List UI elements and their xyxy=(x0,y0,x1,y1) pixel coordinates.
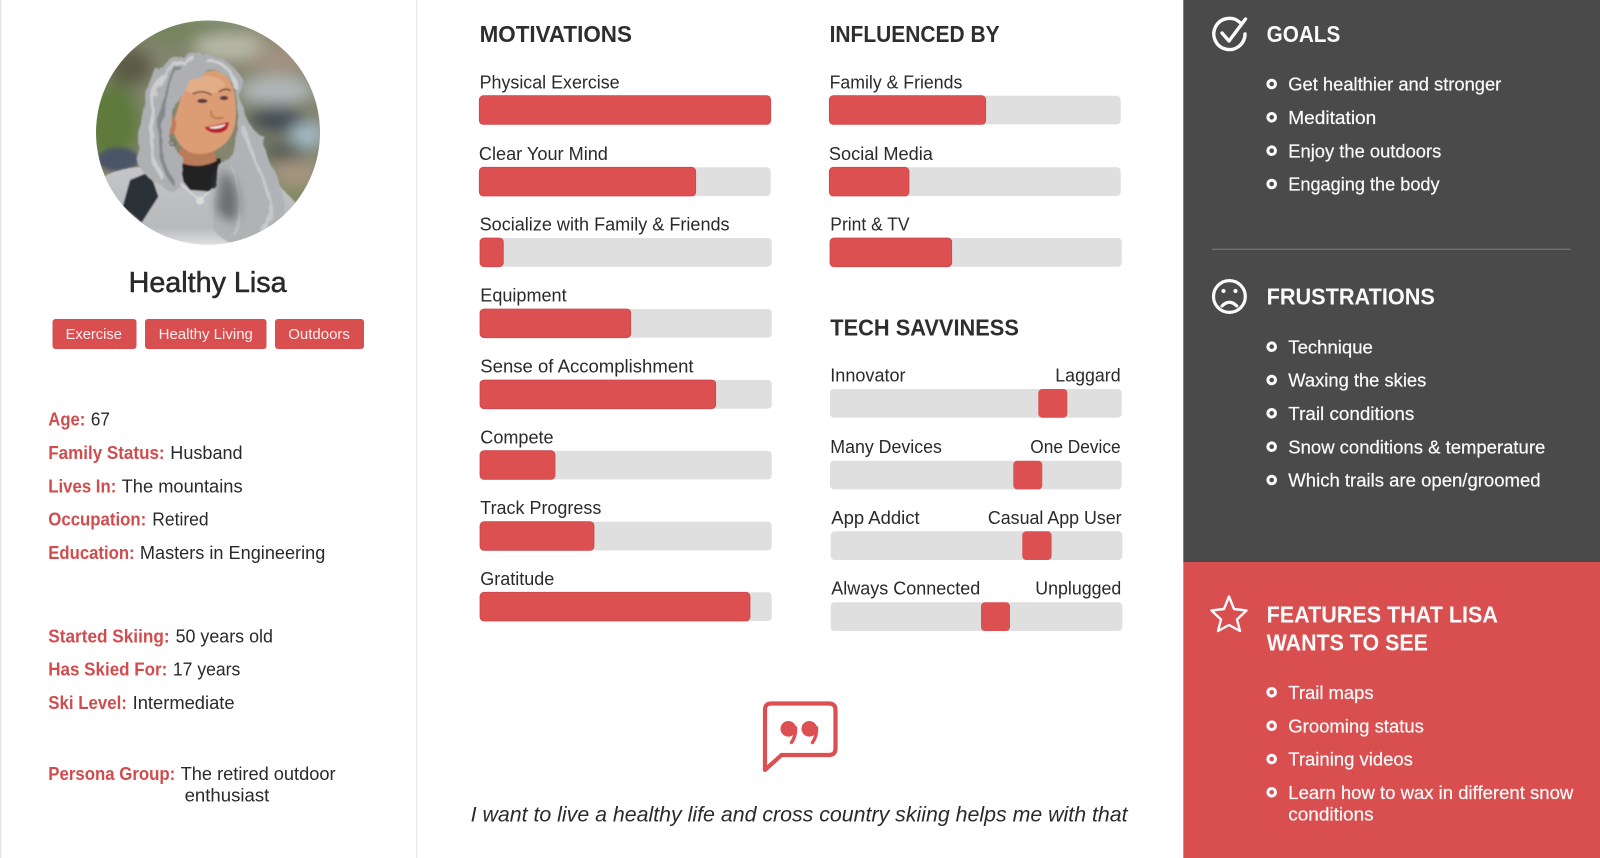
features list: Grooming status xyxy=(1288,716,1424,736)
bar: Sense of Accomplishment: Sense of Accomplishment xyxy=(480,356,694,376)
features list xyxy=(1268,683,1574,825)
demographics: Retired xyxy=(152,510,209,530)
bar: Clear Your Mind xyxy=(479,144,771,196)
heading: tech savviness: TECH SAVVINESS xyxy=(830,314,1019,340)
panel: tech savviness xyxy=(830,314,1122,631)
bar: Compete: Compete xyxy=(480,427,554,447)
demographics: The mountains xyxy=(122,476,243,496)
bar: Print & TV: Print & TV xyxy=(830,215,910,235)
bar: Social Media xyxy=(829,144,1121,196)
persona group: The retired outdoor xyxy=(181,764,336,784)
bar: Gratitude: Gratitude xyxy=(480,569,554,589)
frustrations list: Technique xyxy=(1288,337,1373,357)
goals list: Get healthier and stronger xyxy=(1288,75,1501,95)
slider: Always Connected to Unplugged xyxy=(831,579,1122,631)
goals list: Engaging the body xyxy=(1288,175,1440,195)
skiing details xyxy=(48,626,273,713)
slider: Innovator to Laggard xyxy=(830,366,1122,418)
slider: Innovator to Laggard: Laggard xyxy=(1055,366,1121,386)
heading: frustrations: FRUSTRATIONS xyxy=(1267,284,1435,310)
bar: Clear Your Mind: Clear Your Mind xyxy=(479,144,608,164)
bar: Compete xyxy=(480,427,772,479)
bar: Print & TV xyxy=(830,215,1122,267)
skiing details: Ski Level: xyxy=(48,693,127,713)
bar: Sense of Accomplishment xyxy=(480,356,772,409)
quote xyxy=(471,704,1129,827)
slider: Innovator to Laggard: Innovator xyxy=(830,366,906,386)
heading: features xyxy=(1267,602,1498,655)
features list: Trail maps xyxy=(1288,683,1374,703)
bar: Physical Exercise xyxy=(479,72,771,124)
slider: App Addict to Casual App User xyxy=(831,508,1122,560)
frustrations list: Waxing the skies xyxy=(1288,371,1426,391)
heading: goals: GOALS xyxy=(1267,21,1340,47)
frustrations list: Which trails are open/groomed xyxy=(1288,471,1541,491)
name: Healthy Lisa xyxy=(129,267,287,299)
goals list: Meditation xyxy=(1288,108,1376,128)
tag: Outdoors: Outdoors xyxy=(288,326,350,343)
portrait photo xyxy=(96,20,320,244)
slider: Many Devices to One Device: One Device xyxy=(1030,437,1121,457)
panel: goals and frustrations xyxy=(1183,0,1600,562)
tag: Healthy Living: Healthy Living xyxy=(159,326,253,343)
demographics xyxy=(48,410,325,563)
slider: Always Connected to Unplugged: Always Connected xyxy=(831,579,980,599)
bar: Socialize with Family & Friends xyxy=(480,215,772,267)
sweater xyxy=(100,148,295,253)
goals list: Enjoy the outdoors xyxy=(1288,141,1441,161)
skiing details: Intermediate xyxy=(133,693,235,713)
persona group: Persona Group: xyxy=(48,764,175,784)
bar: Equipment xyxy=(480,286,772,338)
persona group xyxy=(48,764,336,806)
heading: influenced by: INFLUENCED BY xyxy=(830,21,1000,47)
icon: sad face xyxy=(1214,281,1245,312)
face xyxy=(163,70,236,154)
demographics: Occupation: xyxy=(48,510,146,530)
tag: Exercise: Exercise xyxy=(66,326,122,343)
frustrations xyxy=(1214,281,1545,491)
icon: star xyxy=(1212,596,1246,631)
frustrations list xyxy=(1268,337,1545,491)
frustrations list: Snow conditions & temperature xyxy=(1288,437,1545,457)
demographics: Lives In: xyxy=(48,476,116,496)
goals xyxy=(1214,18,1501,195)
slider: App Addict to Casual App User: Casual App User xyxy=(988,508,1122,528)
skiing details: Has Skied For: xyxy=(48,660,167,680)
icon: speech bubble with quotation marks xyxy=(765,704,836,770)
skiing details: 17 years xyxy=(173,660,240,680)
skiing details: 50 years old xyxy=(176,626,273,646)
heading: features: WANTS TO SEE xyxy=(1267,629,1428,655)
facial features xyxy=(170,89,231,205)
bar: Track Progress xyxy=(480,498,772,550)
quote text: I want to live a healthy life and cross country skiing helps me with that xyxy=(471,804,1129,827)
bar: Track Progress: Track Progress xyxy=(480,498,601,518)
bar: Family & Friends: Family & Friends xyxy=(830,72,962,92)
bar: Social Media: Social Media xyxy=(829,144,934,164)
panel: profile xyxy=(48,10,364,806)
tag: Outdoors xyxy=(275,319,364,349)
panel: features xyxy=(1183,562,1600,858)
persona group: enthusiast xyxy=(185,786,269,806)
right hair xyxy=(212,89,284,246)
features list: conditions xyxy=(1288,805,1374,825)
features list: Training videos xyxy=(1288,750,1413,770)
bar: Gratitude xyxy=(480,569,772,621)
heading: motivations: MOTIVATIONS xyxy=(480,21,632,47)
bar: Physical Exercise: Physical Exercise xyxy=(480,72,620,92)
heading: features: FEATURES THAT LISA xyxy=(1267,602,1498,628)
goals list xyxy=(1268,75,1501,195)
slider: Always Connected to Unplugged: Unplugged xyxy=(1035,579,1121,599)
slider: App Addict to Casual App User: App Addict xyxy=(831,508,920,528)
bar: Equipment: Equipment xyxy=(480,286,567,306)
slider: Many Devices to One Device: Many Devices xyxy=(830,437,942,457)
demographics: Age: xyxy=(48,410,85,430)
tag: Exercise xyxy=(52,319,136,349)
bar: Socialize with Family & Friends: Socialize with Family & Friends xyxy=(480,215,730,235)
skiing details: Started Skiing: xyxy=(48,626,170,646)
slider: Many Devices to One Device xyxy=(830,437,1122,489)
tags xyxy=(52,319,364,349)
demographics: Education: xyxy=(48,543,135,563)
demographics: 67 xyxy=(91,410,110,430)
demographics: Masters in Engineering xyxy=(140,543,325,563)
panel: influenced by xyxy=(829,21,1122,267)
frustrations list: Trail conditions xyxy=(1288,404,1414,424)
demographics: Family Status: xyxy=(48,443,165,463)
tag: Healthy Living xyxy=(145,319,266,349)
icon: check circle xyxy=(1214,18,1246,50)
demographics: Husband xyxy=(170,443,243,463)
left hair xyxy=(137,53,243,192)
features list: Learn how to wax in different snow xyxy=(1288,783,1574,803)
bar: Family & Friends xyxy=(829,72,1121,124)
panel: motivations xyxy=(479,21,772,621)
